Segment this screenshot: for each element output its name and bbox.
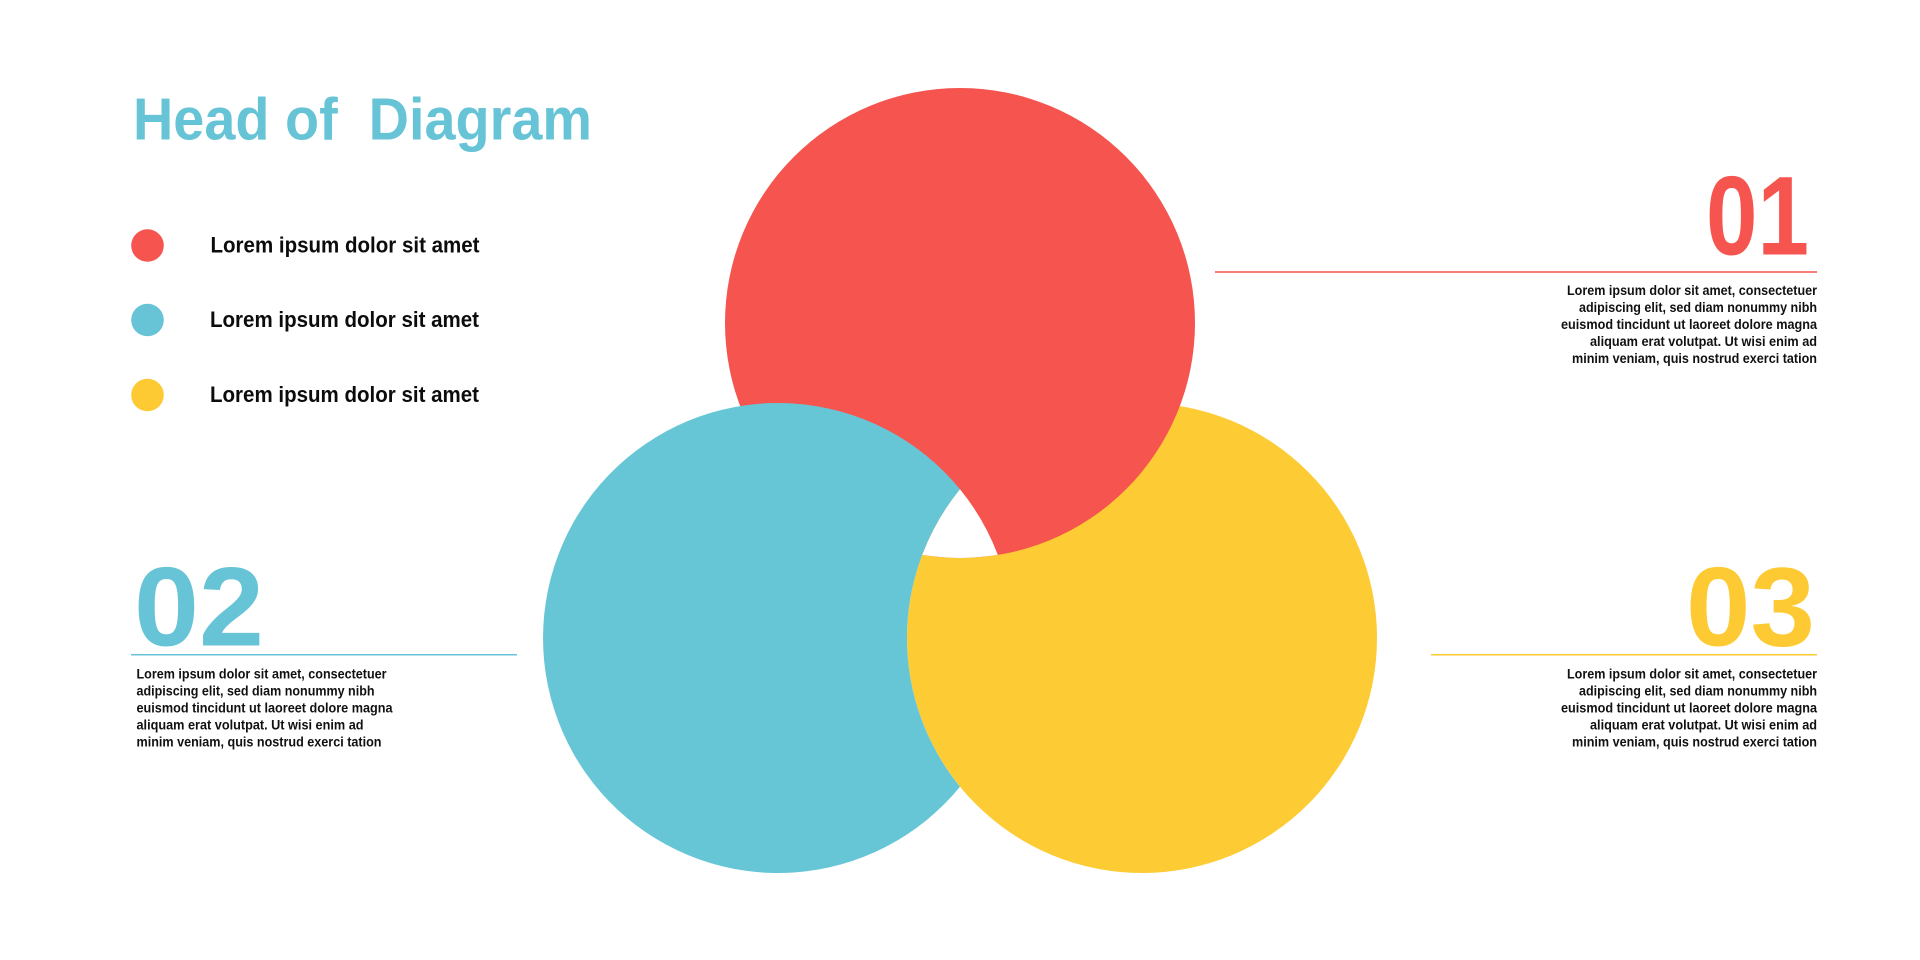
section 02 — [131, 544, 517, 750]
venn diagram — [543, 88, 1377, 873]
text block 03: adipiscing elit, sed diam nonummy nibh — [1579, 682, 1817, 698]
text block 03: Lorem ipsum dolor sit amet, consectetuer — [1567, 666, 1817, 682]
text block 01: adipiscing elit, sed diam nonummy nibh — [1579, 299, 1817, 315]
text block 01: Lorem ipsum dolor sit amet, consectetuer — [1567, 282, 1817, 298]
legend item: blue: Lorem ipsum dolor sit amet — [210, 307, 479, 332]
section 03 — [1431, 544, 1817, 750]
legend item: red: Lorem ipsum dolor sit amet — [210, 232, 480, 258]
center gap — [922, 489, 998, 558]
section 01 — [1215, 154, 1817, 366]
legend — [131, 229, 480, 411]
text block 02: minim veniam, quis nostrud exerci tation — [136, 734, 382, 750]
legend item: yellow: Lorem ipsum dolor sit amet — [210, 382, 479, 407]
text block 01 — [1561, 282, 1817, 366]
circle: blue — [543, 403, 960, 873]
number 03: 03 — [1686, 544, 1815, 670]
text block 01: euismod tincidunt ut laoreet dolore magna — [1561, 316, 1817, 332]
text block 02 — [136, 666, 393, 750]
text block 03: aliquam erat volutpat. Ut wisi enim ad — [1590, 716, 1817, 732]
text block 03 — [1561, 666, 1817, 750]
text block 01: minim veniam, quis nostrud exerci tation — [1572, 350, 1817, 366]
number 01: 01 — [1706, 154, 1809, 278]
circle: red — [725, 88, 1195, 558]
text block 02: aliquam erat volutpat. Ut wisi enim ad — [136, 716, 364, 732]
text block 03: euismod tincidunt ut laoreet dolore magna — [1561, 700, 1817, 716]
legend item: blue — [131, 304, 479, 336]
text block 02: Lorem ipsum dolor sit amet, consectetuer — [136, 666, 387, 682]
legend item: yellow — [131, 379, 479, 411]
text block 01: aliquam erat volutpat. Ut wisi enim ad — [1590, 333, 1817, 349]
legend item: red — [131, 229, 480, 262]
text block 02: adipiscing elit, sed diam nonummy nibh — [136, 682, 374, 698]
title: Head of Diagram — [133, 86, 592, 152]
circle: yellow — [907, 403, 1377, 873]
text block 02: euismod tincidunt ut laoreet dolore magna — [136, 700, 393, 716]
number 02: 02 — [134, 544, 264, 670]
text block 03: minim veniam, quis nostrud exerci tation — [1572, 734, 1817, 750]
